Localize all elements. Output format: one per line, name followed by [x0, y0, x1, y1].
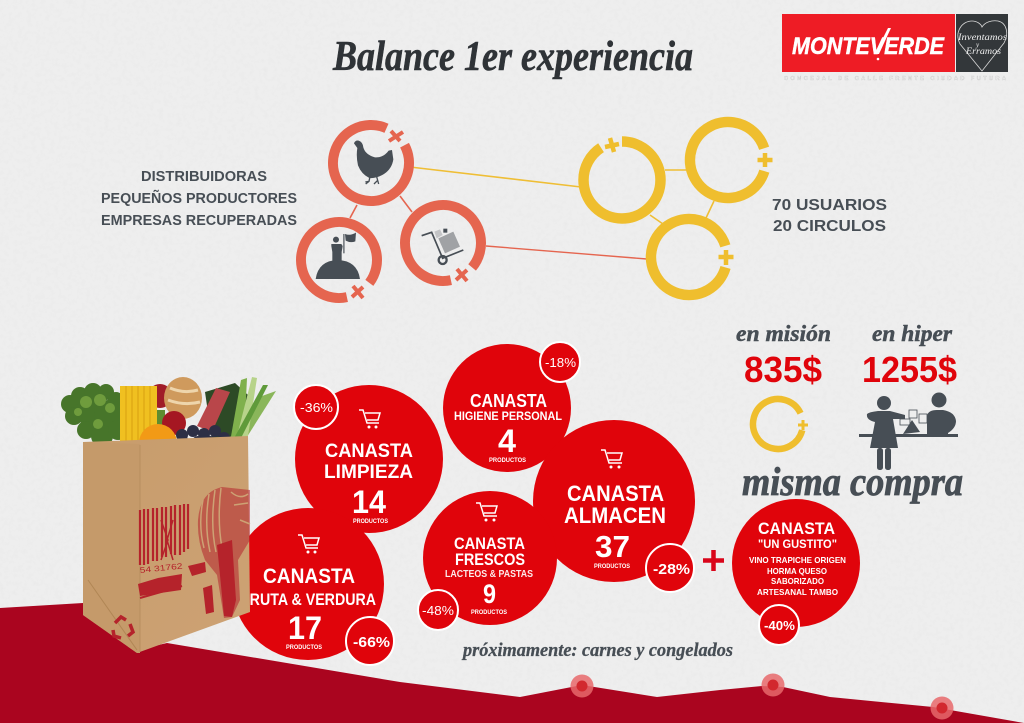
canasta frescos [423, 491, 557, 625]
canasta higiene personal: HIGIENE PERSONAL [454, 409, 562, 423]
yellow network [584, 113, 775, 304]
ring: trolley [398, 198, 488, 288]
canasta un gustito: "UN GUSTITO" [758, 537, 837, 551]
canasta un gustito: SABORIZADO [771, 576, 824, 586]
canasta higiene personal: CANASTA [470, 391, 547, 411]
canasta almacen: 37 [595, 529, 630, 564]
canasta limpieza: LIMPIEZA [324, 461, 413, 483]
car print [138, 574, 182, 596]
canasta fruta y verdura [232, 508, 384, 660]
badge: -28% [646, 544, 694, 592]
canasta un gustito [732, 499, 860, 645]
plus sign [703, 550, 724, 571]
barcode print [140, 504, 188, 598]
canasta frescos: 9 [483, 579, 496, 609]
paper bag [83, 436, 250, 653]
badge: -18% [540, 342, 580, 382]
badge: -36% [294, 385, 338, 429]
canasta almacen [533, 420, 695, 582]
ring: yellow one [584, 138, 660, 218]
hill marker 2 [762, 674, 784, 696]
hill marker 1 [570, 674, 594, 698]
text block: actors [101, 169, 297, 229]
text block: users [772, 197, 887, 235]
canasta frescos: LACTEOS & PASTAS [445, 569, 533, 580]
logo: Monteverde: y [975, 41, 980, 49]
ring: flag on hill [294, 215, 384, 305]
canasta fruta y verdura: CANASTA [263, 565, 355, 588]
logo: Monteverde: Inventamos [957, 33, 1007, 43]
badge: -18%: -18% [545, 356, 576, 370]
logo: Monteverde: Erramos [965, 46, 1002, 56]
label: en mision: en misión [736, 321, 831, 346]
badge: -48% [418, 590, 458, 630]
heading: misma compra: misma compra [742, 459, 963, 504]
canasta limpieza [295, 385, 443, 533]
canasta un gustito: CANASTA [758, 519, 835, 538]
logo: Monteverde: CONCEJAL DE CALLE FRENTE CIUDAD FUTURA [784, 76, 1006, 82]
logo: Monteverde [782, 14, 1008, 82]
badge: -36%: -36% [300, 400, 333, 415]
tiger print [188, 487, 250, 618]
badge: -48%: -48% [422, 603, 454, 618]
canasta fruta y verdura: FRUTA & VERDURA [241, 591, 376, 609]
red hill band [0, 603, 1024, 723]
icon: small yellow ring [747, 393, 809, 455]
price: 1255: 1255$ [862, 349, 957, 390]
ring: yellow two [681, 113, 775, 207]
ring: chicken [320, 112, 422, 214]
text block: actors: PEQUEÑOS PRODUCTORES [101, 189, 297, 207]
canasta frescos: PRODUCTOS [471, 609, 508, 616]
badge: -66%: -66% [353, 634, 390, 651]
coral network [294, 112, 488, 305]
grocery bag illustration [61, 377, 276, 653]
canasta un gustito: ARTESANAL TAMBO [757, 587, 838, 597]
label: en hiper: en hiper [872, 321, 953, 346]
canasta fruta y verdura: 17 [288, 610, 322, 646]
canasta frescos: FRESCOS [455, 550, 525, 569]
canasta limpieza: 14 [352, 484, 386, 520]
text block: users: 70 USUARIOS [772, 197, 887, 214]
text block: actors: EMPRESAS RECUPERADAS [101, 213, 297, 229]
canasta almacen: CANASTA [567, 481, 664, 506]
canasta almacen: ALMACEN [564, 503, 666, 528]
hill marker 3 [930, 696, 954, 720]
recycle mark [113, 617, 133, 638]
title: Balance 1er experiencia [332, 34, 693, 80]
connector: chicken to yellow ring [410, 167, 581, 187]
canasta higiene personal [443, 344, 571, 472]
badge: -40% [759, 605, 799, 645]
canasta fruta y verdura: PRODUCTOS [286, 644, 323, 651]
logo: Monteverde: MONTEVERDE [792, 33, 945, 60]
badge: -40%: -40% [764, 618, 795, 633]
canasta higiene personal: 4 [498, 423, 516, 459]
price: 835: 835$ [744, 349, 822, 390]
icon: supermarket checkout [859, 392, 958, 470]
text block: users: 20 CIRCULOS [773, 218, 886, 235]
canasta limpieza: PRODUCTOS [353, 518, 389, 525]
groceries [61, 377, 276, 462]
canasta almacen: PRODUCTOS [594, 563, 631, 570]
canasta un gustito: HORMA QUESO [767, 566, 827, 576]
canasta frescos: CANASTA [454, 534, 525, 553]
canasta limpieza: CANASTA [325, 440, 413, 462]
text block: actors: DISTRIBUIDORAS [141, 169, 267, 185]
badge: -66% [346, 617, 394, 665]
canasta un gustito: VINO TRAPICHE ORIGEN [749, 555, 846, 565]
barcode number: 54 31762 [139, 561, 184, 575]
badge: -28%: -28% [653, 561, 690, 578]
connector: trolley to yellow ring [486, 246, 647, 259]
ring: yellow three [642, 210, 736, 304]
canasta higiene personal: PRODUCTOS [489, 457, 527, 464]
note: proximamente: próximamente: carnes y congelados [461, 640, 733, 661]
